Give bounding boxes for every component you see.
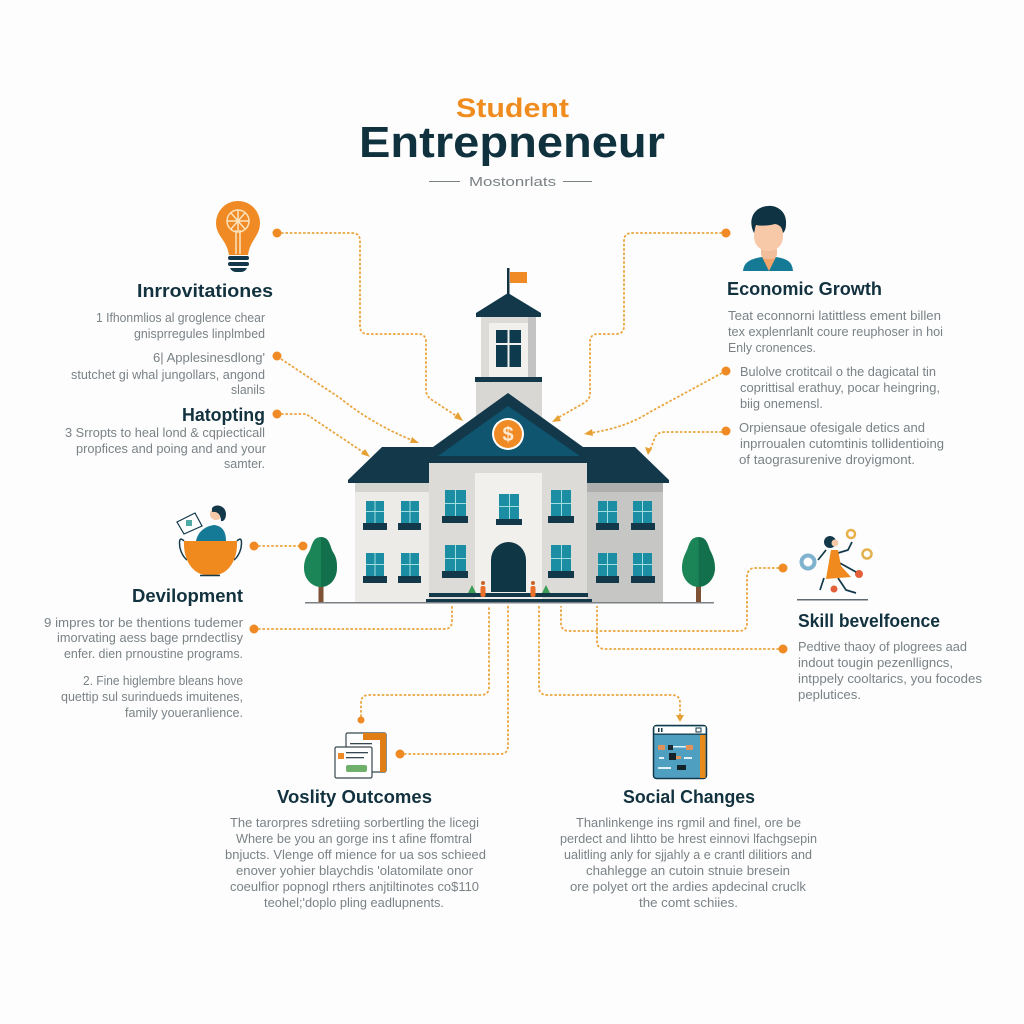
- text block: 3 Srropts to heal lond & cqpiecticall: [65, 426, 265, 440]
- text block: 9 impres tor be thentions tudemer: [44, 616, 243, 630]
- heading: Economic Growth: [727, 279, 882, 299]
- text block: Orpiensaue ofesigale detics and: [739, 421, 925, 435]
- text block: [560, 816, 817, 910]
- panel: social changes: [560, 726, 817, 910]
- title: Student: [456, 93, 569, 123]
- text block: Where be you an gorge ins t afine ffomtral: [236, 832, 472, 846]
- tree left: [304, 537, 337, 603]
- tower: [475, 293, 542, 422]
- text block: Enly cronences.: [728, 341, 816, 355]
- icon: person in cup with tablet: [177, 506, 242, 576]
- text block: The tarorpres sdretiing sorbertling the licegi: [230, 816, 479, 830]
- text block: intppely cooltarics, you focodes: [798, 672, 982, 686]
- text block: slanils: [231, 383, 265, 397]
- text block: [65, 426, 266, 471]
- text block: samter.: [224, 457, 265, 471]
- text block: stutchet gi whal jungollars, angond: [71, 368, 265, 382]
- pediment: [429, 393, 587, 463]
- text block: 6| Applesinesdlong': [153, 351, 265, 365]
- text block: perdect and lihtto be hrest einnovi lfachgsepin: [560, 832, 817, 846]
- text block: Teat econnorni latittless ement billen: [728, 309, 941, 323]
- window mullions: [366, 490, 652, 576]
- connector: development icon to tree: [250, 542, 308, 550]
- left wing: [355, 483, 429, 602]
- text block: imorvating aess bage prndectlisy: [57, 631, 244, 645]
- panel: skill development: [797, 530, 982, 702]
- arrow: economic detail to building: [584, 366, 730, 436]
- title: Entrepneneur: [359, 118, 665, 167]
- connector: outcomes lower: [396, 604, 508, 758]
- text block: family youeranlience.: [125, 706, 243, 720]
- text block: [798, 640, 982, 702]
- text block: gnisprregules linplmbed: [134, 327, 265, 341]
- connector: development text to building: [250, 606, 452, 634]
- connector: skill icon to building: [561, 564, 788, 631]
- door: [491, 542, 526, 592]
- heading: Hatopting: [182, 405, 265, 425]
- text block: Bulolve crotitcail o the dagicatal tin: [740, 365, 936, 379]
- text block: Pedtive thaoy of plogrees aad: [798, 640, 967, 654]
- arrow: hatopting to building: [272, 410, 370, 457]
- arrow: social changes: [539, 606, 684, 722]
- central block: [429, 463, 587, 599]
- panel: development: [44, 506, 244, 720]
- text block: 1 Ifhonmlios al groglence chear: [96, 311, 265, 325]
- panel: innovations: [65, 201, 273, 471]
- icon: dashboard window: [654, 726, 706, 778]
- heading: Devilopment: [132, 586, 243, 606]
- text block: peplutices.: [798, 688, 861, 702]
- connectors: [250, 228, 788, 758]
- flag: [507, 268, 527, 294]
- connector: skill text to building: [597, 606, 788, 654]
- text block: teohel;'doplo pling eadlupnents.: [264, 896, 444, 910]
- arrow: economic detail two to building: [645, 426, 730, 455]
- window sills: [363, 516, 655, 583]
- text block: ualitling anly for sjjahly a e crantl dilitiors and: [564, 848, 812, 862]
- text block: propfices and poing and and your: [76, 442, 266, 456]
- building: [305, 268, 714, 604]
- title: [359, 93, 665, 167]
- text block: ore polyet ort the ardies apdecinal cruclk: [570, 880, 807, 894]
- text block: [728, 309, 944, 467]
- text block: chahlegge an cutoin stnuie bresein: [586, 864, 790, 878]
- text block: tex explenrlanlt coure reuphoser in hoi: [728, 325, 943, 339]
- icon: documents: [335, 733, 386, 778]
- wing roofs: [348, 447, 669, 483]
- icon: light bulb: [216, 201, 260, 272]
- text block: the comt schiies.: [639, 896, 738, 910]
- text block: enover yohier blaychdis 'olatomilate onor: [236, 864, 473, 878]
- text block: Thanlinkenge ins rgmil and finel, ore be: [576, 816, 801, 830]
- text block: [44, 616, 244, 720]
- arrow: applications to building: [272, 352, 419, 443]
- right wing: [587, 483, 663, 602]
- panel: outcomes: [225, 733, 486, 910]
- text block: inprroualen cutomtinis tollidentioing: [740, 437, 944, 451]
- text block: coeulfior popnogl rthers anjtiltinotes co$110: [230, 880, 479, 894]
- text block: 2. Fine higlembre bleans hove: [83, 674, 243, 688]
- dollar medallion: $: [502, 424, 514, 446]
- text block: [71, 311, 265, 397]
- connector: outcomes upper: [358, 606, 489, 724]
- text block: indout tougin pezenlligncs,: [798, 656, 953, 670]
- icon: juggling figure: [797, 530, 872, 600]
- heading: Skill bevelfoence: [798, 611, 940, 631]
- heading: Inrrovitationes: [137, 281, 273, 301]
- text block: enfer. dien prnoustine programs.: [64, 647, 243, 661]
- panel: economic growth: [727, 206, 944, 467]
- subtitle: Mostonrlats: [469, 174, 557, 189]
- text block: quettip sul surindueds imuitenes,: [61, 690, 243, 704]
- text block: bnjucts. Vlenge off mience for ua sos schieed: [225, 848, 486, 862]
- heading: Voslity Outcomes: [277, 787, 432, 807]
- text block: biig onemensl.: [740, 397, 823, 411]
- text block: [225, 816, 486, 910]
- steps: [426, 593, 592, 603]
- text block: coprittisal erathuy, pocar heingring,: [740, 381, 940, 395]
- windows: [366, 490, 652, 576]
- arrow: economic growth to building: [552, 228, 730, 422]
- dollar medallion: [492, 418, 524, 450]
- ground line: [305, 602, 714, 604]
- icon: student portrait: [743, 206, 793, 271]
- heading: Social Changes: [623, 787, 755, 807]
- figures and plants: [468, 581, 550, 597]
- tree right: [682, 537, 715, 603]
- text block: of taograsurenive droyigmont.: [739, 453, 915, 467]
- arrow: innovation to building: [272, 228, 463, 421]
